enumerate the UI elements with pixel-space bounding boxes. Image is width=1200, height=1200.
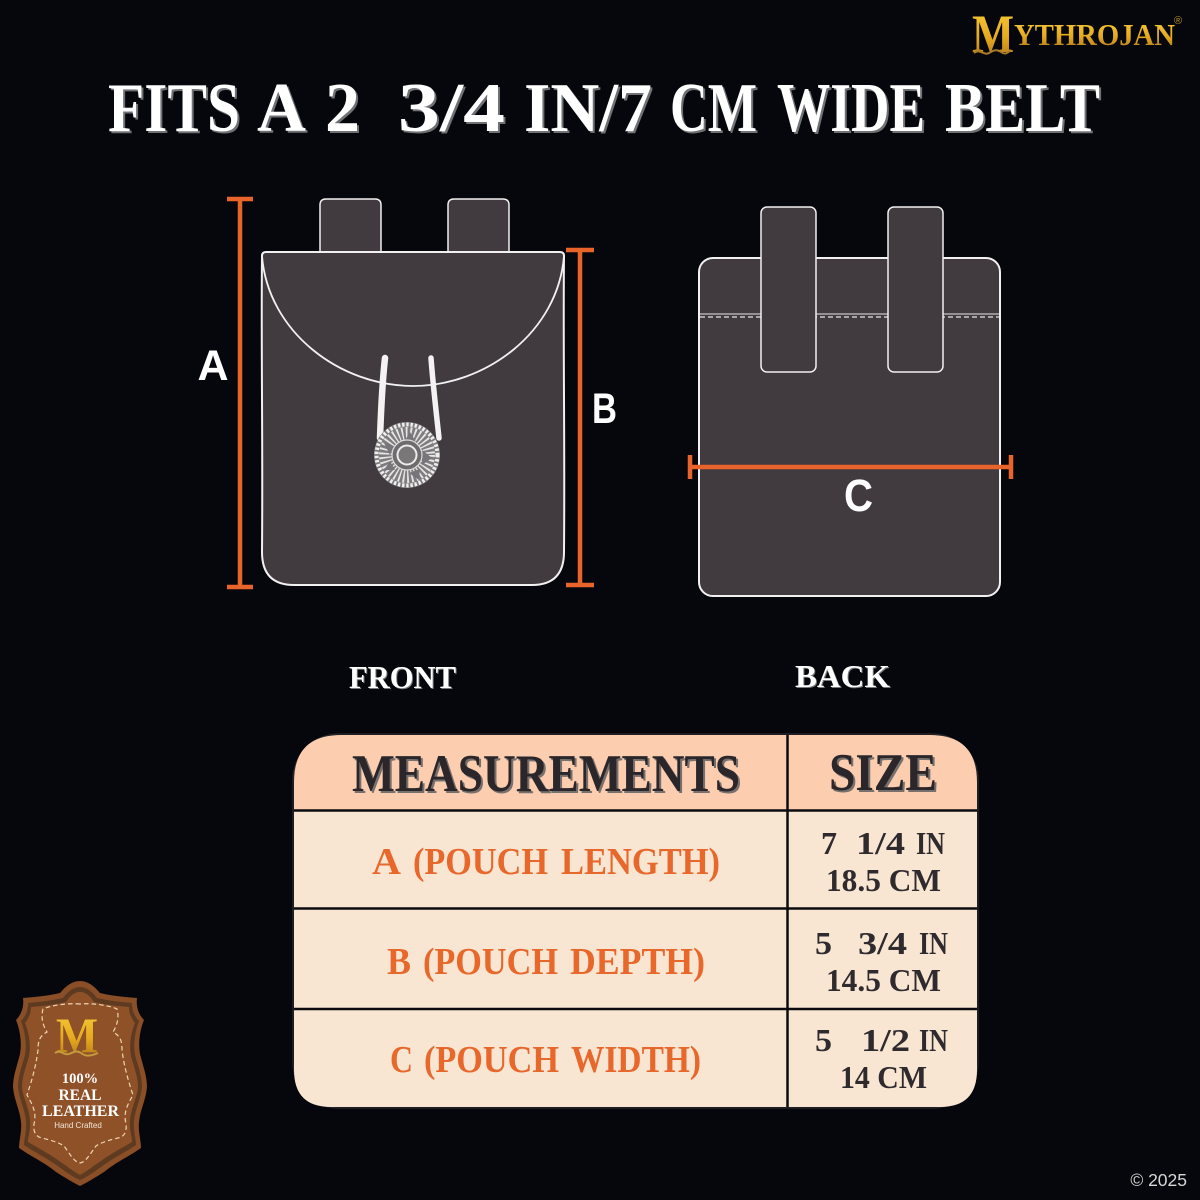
header: measurements: MEASUREMENTS — [352, 745, 740, 803]
row C size: 5 — [815, 1022, 832, 1058]
title: A — [257, 70, 306, 147]
row B size — [815, 925, 948, 998]
title: IN/7 — [524, 70, 652, 147]
dimension A: A — [197, 342, 229, 390]
row B label: DEPTH) — [570, 941, 705, 983]
row C label: (POUCH — [424, 1039, 559, 1081]
badge: 100% real leather — [13, 981, 147, 1186]
back pouch illustration — [699, 207, 1000, 596]
stitch line — [700, 313, 999, 315]
row B label: (POUCH — [423, 941, 558, 983]
title: A — [259, 72, 308, 149]
dimension C — [690, 455, 1011, 521]
front pouch illustration — [262, 199, 564, 585]
row B label — [387, 941, 705, 983]
row B size: 14.5 CM — [826, 962, 941, 998]
logo: Mythrojan: ® — [1174, 15, 1182, 27]
copyright: © 2025 — [1130, 1170, 1187, 1190]
title: BELT — [945, 70, 1100, 147]
badge: 100% real leather: REAL — [58, 1087, 102, 1104]
row A label: (POUCH — [413, 841, 548, 883]
title: FITS — [110, 72, 242, 149]
row C label — [390, 1039, 701, 1081]
badge: 100% real leather: LEATHER — [42, 1103, 120, 1120]
title: CM — [672, 72, 759, 149]
title: CM — [670, 70, 757, 147]
row A label: LENGTH) — [561, 841, 720, 883]
table grid lines — [294, 735, 977, 1107]
leather strap loop — [380, 358, 385, 438]
dimension C: C — [844, 470, 873, 521]
badge text: 100% — [62, 1071, 98, 1087]
row B size: IN — [919, 925, 948, 961]
row A size: 7 — [821, 825, 837, 861]
row B size: 5 — [815, 925, 832, 961]
row C size — [815, 1022, 948, 1095]
table header background — [294, 735, 977, 810]
badge stitching — [27, 1004, 133, 1163]
belt loops front — [320, 199, 509, 252]
label: front: FRONT — [350, 660, 457, 696]
title: BELT — [947, 72, 1102, 149]
title: 2 — [327, 72, 362, 149]
title — [108, 70, 1102, 149]
row C size: 1/2 — [861, 1022, 910, 1058]
title: IN/7 — [526, 72, 654, 149]
title: 2 — [325, 70, 360, 147]
header: measurements: MEASUREMENTS — [354, 747, 742, 805]
logo: Mythrojan: YTHROJAN — [1014, 17, 1175, 52]
dimension B — [566, 250, 617, 585]
pouch body front — [262, 252, 564, 585]
table body background — [294, 810, 977, 1107]
logo: Mythrojan: M — [972, 4, 1014, 64]
pouch body back — [699, 258, 1000, 596]
row A size: IN — [916, 825, 945, 861]
row A size: 18.5 CM — [826, 862, 941, 898]
row A size — [821, 825, 945, 898]
pouch flap line — [262, 256, 564, 386]
label: front: FRONT — [349, 659, 456, 695]
row A label — [372, 841, 720, 883]
title: FITS — [108, 70, 240, 147]
title: WIDE — [777, 70, 925, 147]
dimension A — [197, 199, 253, 587]
row A label: A — [372, 841, 402, 883]
logo: Mythrojan — [972, 4, 1182, 64]
badge: 100% real leather: Hand Crafted — [54, 1121, 102, 1130]
title: WIDE — [779, 72, 927, 149]
row B label: B — [387, 941, 411, 983]
header: size: SIZE — [831, 746, 939, 804]
title: 3/4 — [400, 72, 507, 149]
label: back: BACK — [795, 658, 890, 694]
metal button — [374, 422, 440, 488]
dimension B: B — [592, 385, 617, 433]
header: size: SIZE — [829, 744, 937, 802]
row C size: 14 CM — [840, 1059, 927, 1095]
row B size: 3/4 — [858, 925, 907, 961]
label: back: BACK — [796, 659, 891, 695]
table outer edge — [293, 734, 978, 1108]
badge monogram: M — [56, 1007, 98, 1063]
row A size: 1/4 — [856, 825, 905, 861]
title: 3/4 — [398, 70, 505, 147]
row C label: C — [390, 1039, 413, 1081]
row C size: IN — [919, 1022, 948, 1058]
belt loops back — [761, 207, 943, 372]
row C label: WIDTH) — [571, 1039, 701, 1081]
measurements table — [293, 734, 978, 1108]
